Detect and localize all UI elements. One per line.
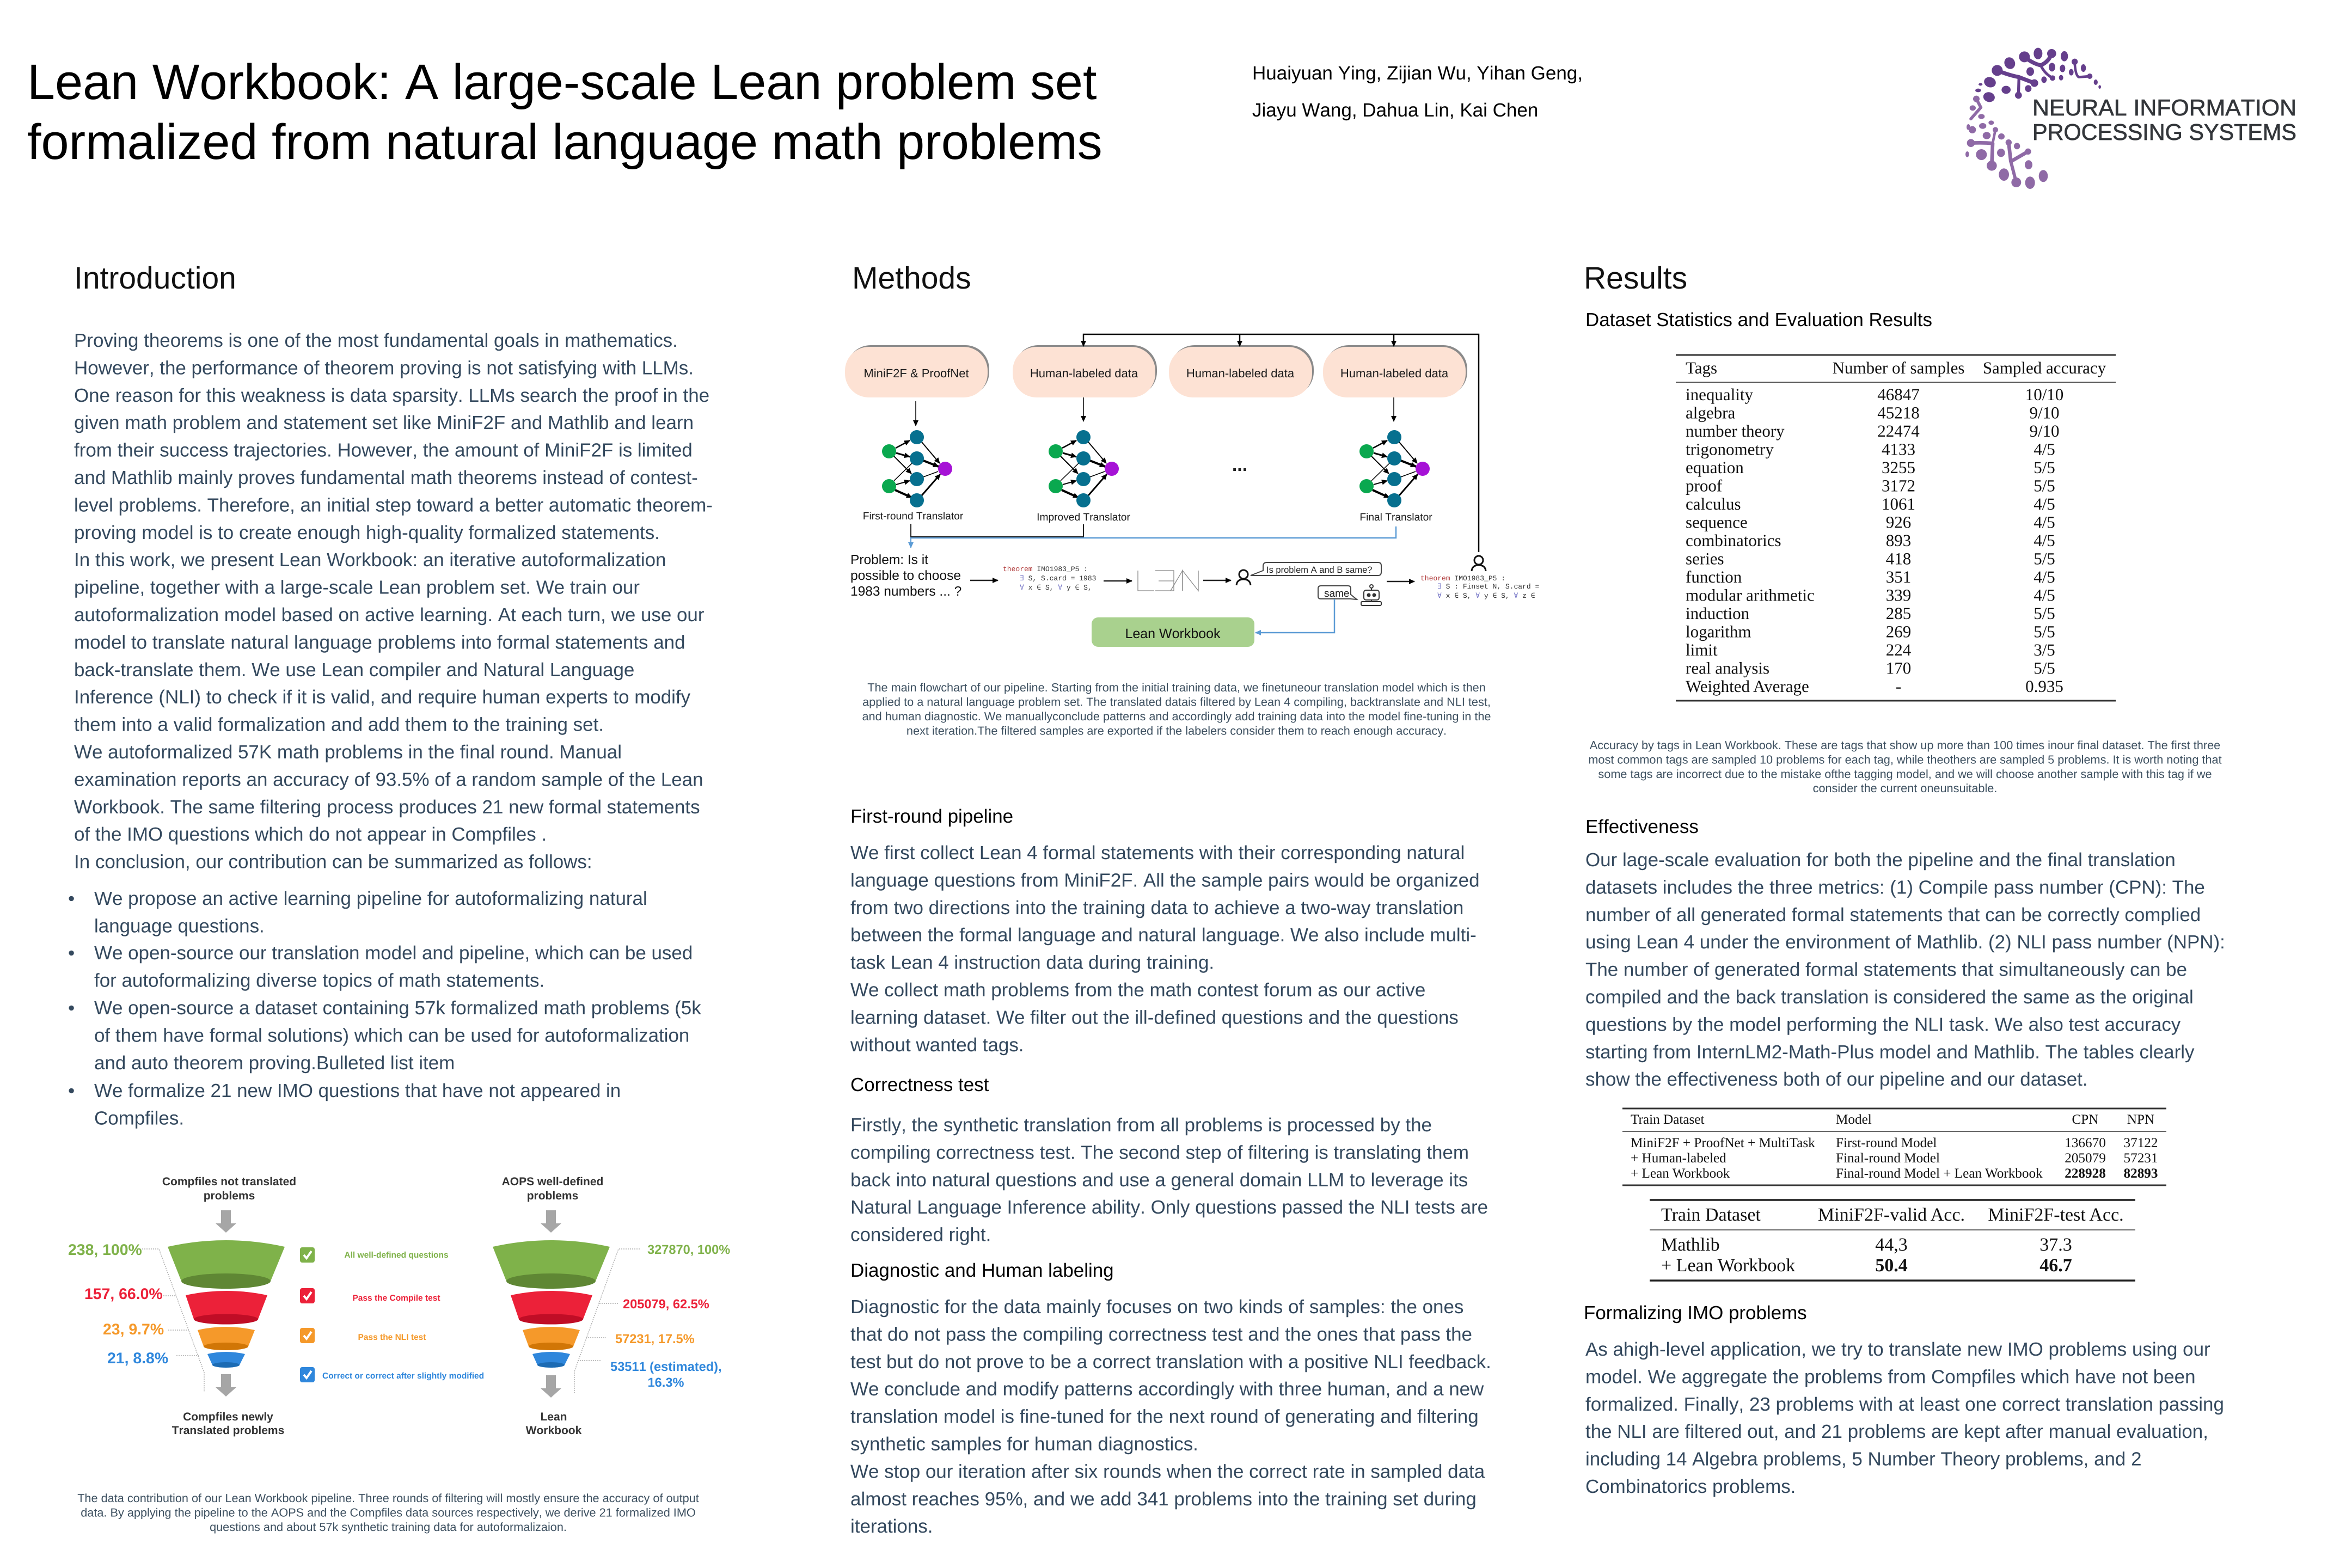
legend: Pass the NLI test [358, 1333, 426, 1342]
table: tags accuracy: 4/5 [2033, 567, 2055, 586]
text block: first-round pipeline: learning dataset. We filter out the ill-defined questions and the questions [850, 1007, 1459, 1028]
table: tags accuracy: induction [1686, 604, 1750, 623]
subheading: effectiveness: Effectiveness [1585, 816, 1699, 837]
lean code snippet: theorem [1003, 565, 1033, 573]
translator labels: Final Translator [1359, 512, 1432, 523]
subheading: first-round pipeline: First-round pipeline [850, 806, 1013, 827]
caption: tags table: consider the current oneunsuitable. [1813, 781, 1997, 795]
text block: formalizing IMO problems: the NLI are filtered out, and 21 problems are kept after manual evaluation, [1585, 1421, 2208, 1442]
table: tags accuracy: function [1686, 567, 1742, 586]
table: tags accuracy: 285 [1886, 604, 1911, 623]
table: MiniF2F accuracy: Train Dataset [1661, 1205, 1761, 1225]
table: tags accuracy: 4133 [1882, 440, 1915, 458]
text block: correctness test: compiling correctness test. The second step of filtering is translating them [850, 1142, 1469, 1163]
bulleted contributions list [68, 888, 701, 1129]
heading: methods: Methods [852, 261, 971, 296]
table: pipeline CPN and NPN: 228928 [2065, 1166, 2106, 1181]
bulleted contributions list: • [68, 1080, 75, 1101]
ellipsis: ... [1232, 455, 1247, 475]
table: pipeline CPN and NPN: CPN [2072, 1112, 2098, 1127]
text block: introduction body: and Mathlib mainly proves fundamental math theorems instead of contest- [74, 467, 698, 488]
panel: results [1584, 261, 2225, 1497]
text block: introduction body: them into a valid formalization and add them to the training set. [74, 714, 604, 736]
caption: flowchart: The main flowchart of our pipeline. Starting from the initial training data, we finetuneour translation model which is then [867, 681, 1486, 694]
lean code snippet output: x ∈ S, ∀ y ∈ S, ∀ z ∈ [1446, 592, 1535, 600]
table: pipeline CPN and NPN: 57231 [2124, 1151, 2158, 1166]
feedback arrows [916, 334, 1479, 552]
table: MiniF2F accuracy [1650, 1200, 2135, 1281]
lean code snippet: ∃ [1020, 574, 1024, 583]
table: tags accuracy: 22474 [1877, 421, 1920, 440]
icon: robot [1361, 585, 1381, 605]
text block: diagnostic: translation model is fine-tuned for the next round of generating and filtering [850, 1406, 1479, 1428]
data pills: Human-labeled data [1340, 366, 1449, 380]
text block: introduction body: In conclusion, our contribution can be summarized as follows: [74, 852, 592, 873]
table: pipeline CPN and NPN: 82893 [2124, 1166, 2158, 1181]
lean code snippet: ∀ [1020, 584, 1024, 592]
translator labels [863, 511, 1432, 523]
text block: introduction body: from their success trajectories. However, the amount of MiniF2F is limited [74, 440, 693, 461]
problem text: possible to choose [850, 568, 961, 583]
text block: introduction body: Inference (NLI) to check if it is valid, and require human experts to modify [74, 687, 691, 708]
speech bubble: same: same [1324, 588, 1349, 599]
table: tags accuracy: 1061 [1882, 494, 1915, 513]
funnel values left: 21, 8.8% [107, 1350, 168, 1367]
funnel titles: Workbook [526, 1424, 582, 1437]
text block: introduction body: We autoformalized 57K math problems in the final round. Manual [74, 742, 622, 763]
text block: effectiveness: questions by the model performing the NLI task. We also test accuracy [1585, 1014, 2181, 1035]
table: tags accuracy: 893 [1886, 531, 1911, 550]
table: tags accuracy: 10/10 [2025, 385, 2063, 404]
table: tags accuracy: 224 [1886, 640, 1912, 659]
data pills: MiniF2F & ProofNet [863, 366, 969, 380]
authors: Huaiyuan Ying, Zijian Wu, Yihan Geng, [1252, 63, 1583, 84]
funnel values right: 327870, 100% [647, 1243, 730, 1257]
table: tags accuracy: Number of samples [1833, 358, 1964, 377]
table: tags accuracy: real analysis [1686, 659, 1769, 677]
text block: introduction body: Proving theorems is one of the most fundamental goals in mathematics. [74, 330, 678, 351]
funnel arrows [216, 1210, 561, 1398]
table: pipeline CPN and NPN: First-round Model [1836, 1136, 1937, 1150]
bulleted contributions list: of them have formal solutions) which can be used for autoformalization [94, 1025, 689, 1046]
table: tags accuracy: 5/5 [2033, 659, 2055, 677]
text block: effectiveness: starting from InternLM2-Math-Plus model and Mathlib. The tables clearly [1585, 1042, 2195, 1063]
text block: diagnostic: test but do not prove to be a correct translation with a positive NLI feedback. [850, 1351, 1491, 1373]
subheading: diagnostic: Diagnostic and Human labeling [850, 1260, 1114, 1281]
dotted leader lines [142, 1249, 640, 1393]
table: MiniF2F accuracy: 50.4 [1875, 1255, 1908, 1276]
table: tags accuracy: 3/5 [2033, 640, 2055, 659]
data pills: Human-labeled data [1030, 366, 1138, 380]
funnel values right: 53511 (estimated), [610, 1360, 722, 1374]
lean code snippet: x ∈ S, ∀ y ∈ S, [1028, 584, 1092, 592]
table: tags accuracy [1676, 355, 2116, 701]
funnel values right: 16.3% [648, 1376, 684, 1390]
table: MiniF2F accuracy: 46.7 [2039, 1255, 2072, 1276]
text block: introduction body: level problems. Therefore, an initial step toward a better automatic theorem- [74, 494, 713, 516]
text block: introduction body: pipeline, together with a large-scale Lean problem set. We train our [74, 577, 640, 598]
bulleted contributions list: and auto theorem proving.Bulleted list item [94, 1052, 455, 1074]
lean code snippet: S, S.card = 1983 [1024, 574, 1096, 583]
text block: first-round pipeline: from two directions into the training data to achieve a two-way translation [850, 897, 1463, 918]
funnel titles: problems [527, 1190, 578, 1202]
text block: correctness test: considered right. [850, 1224, 991, 1246]
table: tags accuracy: logarithm [1686, 622, 1751, 641]
table: tags accuracy: 9/10 [2029, 421, 2060, 440]
network icon: first-round translator [882, 430, 952, 507]
text block: introduction body: proving model is to create enough high-quality formalized statements. [74, 522, 660, 543]
table: tags accuracy: 45218 [1877, 403, 1920, 422]
subheading: dataset statistics: Dataset Statistics and Evaluation Results [1585, 309, 1932, 330]
caption: tags table: Accuracy by tags in Lean Workbook. These are tags that show up more than 100 times inour final dataset. The first three [1590, 738, 2220, 752]
legend: All well-defined questions [344, 1251, 449, 1260]
text block: diagnostic: We conclude and modify patterns accordingly with three human, and a new [850, 1379, 1484, 1400]
funnel values left: 157, 66.0% [84, 1285, 163, 1303]
text block: diagnostic: We stop our iteration after six rounds when the correct rate in sampled data [850, 1461, 1485, 1482]
table: pipeline CPN and NPN: Model [1836, 1112, 1872, 1127]
funnel values right: 57231, 17.5% [615, 1332, 695, 1346]
text block: first-round pipeline: We collect math problems from the math contest forum as our active [850, 979, 1425, 1001]
table: tags accuracy: sequence [1686, 513, 1748, 531]
table: tags accuracy: 926 [1886, 513, 1911, 531]
table: tags accuracy: modular arithmetic [1686, 586, 1815, 604]
table: tags accuracy: 418 [1886, 549, 1911, 568]
table: tags accuracy: 4/5 [2033, 531, 2055, 550]
text block: first-round pipeline: We first collect Lean 4 formal statements with their corresponding natural [850, 842, 1465, 863]
data pills: Human-labeled data [1186, 366, 1295, 380]
table: MiniF2F accuracy: 37.3 [2039, 1235, 2072, 1255]
speech bubble: question: Is problem A and B same? [1266, 565, 1372, 575]
bulleted contributions list: We formalize 21 new IMO questions that have not appeared in [94, 1080, 621, 1101]
text block: first-round pipeline: without wanted tags. [850, 1034, 1024, 1056]
table: MiniF2F accuracy: Mathlib [1661, 1235, 1720, 1255]
table: tags accuracy: - [1896, 677, 1901, 696]
table: tags accuracy: 0.935 [2025, 677, 2063, 696]
lean code snippet output: ∀ [1437, 592, 1442, 600]
table: tags accuracy: 46847 [1877, 385, 1920, 404]
text block: diagnostic: Diagnostic for the data mainly focuses on two kinds of samples: the ones [850, 1296, 1463, 1318]
table: pipeline CPN and NPN: 37122 [2124, 1136, 2158, 1150]
table: tags accuracy: limit [1686, 640, 1718, 659]
table: pipeline CPN and NPN: MiniF2F + ProofNet + MultiTask [1631, 1136, 1815, 1150]
table: tags accuracy: 3255 [1882, 458, 1915, 477]
panel: introduction [68, 261, 730, 1534]
caption: data contribution: questions and about 57k synthetic training data for autoformalizaion. [210, 1520, 567, 1534]
table: tags accuracy: 5/5 [2033, 549, 2055, 568]
table: pipeline CPN and NPN [1622, 1108, 2166, 1185]
table: tags accuracy: 170 [1886, 659, 1911, 677]
table: pipeline CPN and NPN: Final-round Model [1836, 1151, 1940, 1166]
table: pipeline CPN and NPN: Train Dataset [1631, 1112, 1704, 1127]
text block: diagnostic: almost reaches 95%, and we add 341 problems into the training set during [850, 1489, 1477, 1510]
network icon: improved translator [1049, 430, 1119, 507]
table: tags accuracy: Sampled accuracy [1983, 358, 2106, 377]
caption: data contribution: data. By applying the pipeline to the AOPS and the Compfiles data sources respectively, we derive 21 formalized IMO [81, 1506, 696, 1519]
left funnel [168, 1240, 285, 1368]
table: tags accuracy: inequality [1686, 385, 1753, 404]
process arrows [970, 580, 1414, 581]
translator labels: First-round Translator [863, 511, 964, 522]
text block: correctness test: Firstly, the synthetic translation from all problems is processed by the [850, 1114, 1432, 1136]
funnel values left [68, 1241, 168, 1367]
table: tags accuracy: number theory [1686, 421, 1785, 440]
flowchart: pipeline [845, 334, 1539, 647]
table: tags accuracy: 3172 [1882, 476, 1915, 495]
text block: effectiveness: Our lage-scale evaluation for both the pipeline and the final translation [1585, 849, 2176, 871]
subheading: formalizing IMO problems: Formalizing IMO problems [1584, 1302, 1807, 1324]
bulleted contributions list: We open-source a dataset containing 57k formalized math problems (5k [94, 997, 701, 1019]
funnel chart: data contribution [68, 1175, 730, 1437]
text block: diagnostic: iterations. [850, 1516, 933, 1537]
funnel values right: 205079, 62.5% [623, 1297, 709, 1312]
translator labels: Improved Translator [1037, 512, 1130, 523]
text block: effectiveness: The number of generated formal statements that simultaneously can be [1585, 959, 2187, 981]
table: MiniF2F accuracy: 44,3 [1875, 1235, 1908, 1255]
right funnel [493, 1240, 610, 1368]
table: pipeline CPN and NPN: Final-round Model + Lean Workbook [1836, 1166, 2043, 1181]
table: tags accuracy: Tags [1686, 358, 1717, 377]
text block: introduction body: examination reports an accuracy of 93.5% of a random sample of the Lean [74, 769, 703, 790]
network icon: final translator [1359, 430, 1430, 507]
logo: Neural Information Processing Systems [1965, 48, 2296, 189]
funnel titles: Lean [540, 1411, 567, 1423]
table: MiniF2F accuracy: + Lean Workbook [1661, 1255, 1795, 1276]
text block: formalizing IMO problems: formalized. Finally, 23 problems with at least one correct translation passing [1585, 1394, 2224, 1415]
lean code snippet: IMO1983_P5 : [1033, 565, 1088, 573]
table: pipeline CPN and NPN: 136670 [2065, 1136, 2106, 1150]
table: pipeline CPN and NPN: + Human-labeled [1631, 1151, 1726, 1166]
title: formalized from natural language math problems [27, 114, 1102, 170]
table: tags accuracy: 9/10 [2029, 403, 2060, 422]
bulleted contributions list: • [68, 997, 75, 1019]
funnel titles: AOPS well-defined [502, 1175, 603, 1188]
table: tags accuracy: trigonometry [1686, 440, 1774, 458]
speech bubble: question [1251, 562, 1381, 575]
funnel values left: 23, 9.7% [103, 1321, 164, 1338]
table: tags accuracy: 4/5 [2033, 494, 2055, 513]
text block: effectiveness: compiled and the back translation is considered the same as the original [1585, 987, 2194, 1008]
heading: results: Results [1584, 261, 1687, 296]
lean code snippet output: S : Finset N, S.card = [1442, 583, 1539, 591]
text block: introduction body: given math problem and statement set like MiniF2F and Mathlib and learn [74, 412, 694, 433]
text block: diagnostic: that do not pass the compiling correctness test and the ones that pass the [850, 1324, 1472, 1345]
caption: tags table: some tags are incorrect due to the mistake ofthe tagging model, and we will choose another sample with this tag if we [1598, 767, 2212, 781]
text block: effectiveness: datasets includes the three metrics: (1) Compile pass number (CPN): The [1585, 877, 2205, 898]
text block: formalizing IMO problems: Combinatorics problems. [1585, 1476, 1796, 1497]
panel: methods [845, 261, 1539, 1537]
funnel titles: Translated problems [172, 1424, 284, 1437]
bulleted contributions list: We open-source our translation model and pipeline, which can be used [94, 942, 693, 964]
funnel values left: 238, 100% [68, 1241, 142, 1259]
caption: data contribution: The data contribution of our Lean Workbook pipeline. Three rounds of filtering will mostly ensure the accuracy of output [77, 1491, 699, 1505]
table: tags accuracy: equation [1686, 458, 1744, 477]
text block: introduction body: One reason for this weakness is data sparsity. LLMs search the proof in the [74, 385, 709, 406]
data pills [845, 345, 1467, 397]
caption: flowchart: and human diagnostic. We manuallyconclude patterns and accordingly add training data into the model fine-tuning in the [862, 709, 1491, 723]
table: MiniF2F accuracy: MiniF2F-valid Acc. [1818, 1205, 1965, 1225]
icon: human reviewer [1472, 556, 1486, 571]
table: tags accuracy: 5/5 [2033, 476, 2055, 495]
table: tags accuracy: 5/5 [2033, 604, 2055, 623]
icon: lean logo [1138, 571, 1198, 591]
text block: formalizing IMO problems: model. We aggregate the problems from Compfiles which have not been [1585, 1366, 2196, 1387]
table: tags accuracy: 269 [1886, 622, 1911, 641]
text block: effectiveness: show the effectiveness both of our pipeline and our dataset. [1585, 1069, 2088, 1090]
text block: introduction body: model to translate natural language problems into formal statements and [74, 632, 685, 653]
text block: introduction body: In this work, we present Lean Workbook: an iterative autoformalization [74, 549, 666, 571]
table: tags accuracy: 4/5 [2033, 513, 2055, 531]
text block: introduction body: autoformalization model based on active learning. At each turn, we use our [74, 604, 705, 626]
authors: Jiayu Wang, Dahua Lin, Kai Chen [1252, 100, 1538, 121]
text block: correctness test: Natural Language Inference ability. Only questions passed the NLI tests are [850, 1197, 1488, 1218]
text block: effectiveness: number of all generated formal statements that can be correctly complied [1585, 904, 2201, 926]
bulleted contributions list: Compfiles. [94, 1107, 184, 1129]
heading: introduction: Introduction [74, 261, 236, 296]
lean workbook box: Lean Workbook [1125, 626, 1221, 641]
table: pipeline CPN and NPN: 205079 [2065, 1151, 2106, 1166]
text block: first-round pipeline: between the formal language and natural language. We also include multi- [850, 924, 1477, 946]
table: tags accuracy: calculus [1686, 494, 1741, 513]
bulleted contributions list: We propose an active learning pipeline for autoformalizing natural [94, 888, 647, 909]
text block: correctness test: back into natural questions and use a general domain LLM to leverage its [850, 1169, 1468, 1191]
text block: first-round pipeline: task Lean 4 instruction data during training. [850, 952, 1214, 973]
title: Lean Workbook: A large-scale Lean problem set [27, 54, 1097, 110]
table: tags accuracy: 5/5 [2033, 622, 2055, 641]
bulleted contributions list: language questions. [94, 915, 265, 936]
text block: introduction body: Workbook. The same filtering process produces 21 new formal statements [74, 797, 700, 818]
lean code snippet output: IMO1983_P5 : [1450, 574, 1505, 583]
table: tags accuracy: 4/5 [2033, 586, 2055, 604]
table: tags accuracy: Weighted Average [1686, 677, 1809, 696]
lean code snippet output: theorem [1420, 574, 1450, 583]
caption: flowchart: next iteration.The filtered samples are exported if the labelers consider them to reach enough accuracy. [906, 724, 1447, 737]
lean workbook box [1092, 617, 1254, 647]
table: tags accuracy: algebra [1686, 403, 1735, 422]
arrow to lean workbook [1255, 599, 1334, 633]
table: tags accuracy: series [1686, 549, 1724, 568]
legend: Pass the Compile test [352, 1294, 440, 1303]
funnel titles [162, 1175, 603, 1437]
bulleted contributions list: for autoformalizing diverse topics of math statements. [94, 970, 544, 991]
logo: Neural Information Processing Systems: NEURAL INFORMATION [2032, 95, 2296, 120]
text block: formalizing IMO problems: As ahigh-level application, we try to translate new IMO problems using our [1585, 1339, 2210, 1360]
table: tags accuracy: combinatorics [1686, 531, 1781, 550]
funnel values right [610, 1243, 730, 1390]
subheading: correctness test: Correctness test [850, 1074, 989, 1095]
text block: diagnostic: synthetic samples for human diagnostics. [850, 1434, 1198, 1455]
translator connectors [911, 524, 1396, 548]
funnel titles: problems [204, 1190, 255, 1202]
table: MiniF2F accuracy: MiniF2F-test Acc. [1988, 1205, 2124, 1225]
funnel titles: Compfiles newly [183, 1411, 273, 1423]
text block: introduction body: of the IMO questions which do not appear in Compfiles . [74, 824, 547, 845]
problem text: Problem: Is it [850, 553, 928, 567]
legend [300, 1247, 484, 1382]
bulleted contributions list: • [68, 888, 75, 909]
caption: tags table: most common tags are sampled 10 problems for each tag, while theothers are sampled 5 problems. It is worth noting that [1588, 752, 2222, 766]
icon: human [1236, 570, 1251, 585]
text block: formalizing IMO problems: including 14 Algebra problems, 5 Number Theory problems, and 2 [1585, 1449, 2142, 1470]
table: pipeline CPN and NPN: + Lean Workbook [1631, 1166, 1730, 1181]
table: tags accuracy: proof [1686, 476, 1723, 495]
text block: effectiveness: using Lean 4 under the environment of Mathlib. (2) NLI pass number (NPN): [1585, 932, 2225, 953]
table: tags accuracy: 5/5 [2033, 458, 2055, 477]
table: tags accuracy: 4/5 [2033, 440, 2055, 458]
bulleted contributions list: • [68, 942, 75, 964]
funnel titles: Compfiles not translated [162, 1175, 296, 1188]
speech bubble: same [1318, 586, 1357, 599]
table: tags accuracy: 351 [1886, 567, 1911, 586]
text block: introduction body: back-translate them. We use Lean compiler and Natural Language [74, 659, 634, 681]
text block: introduction body: However, the performance of theorem proving is not satisfying with LLMs. [74, 357, 694, 378]
problem text: 1983 numbers ... ? [850, 584, 961, 599]
table: pipeline CPN and NPN: NPN [2127, 1112, 2154, 1127]
logo: Neural Information Processing Systems: PROCESSING SYSTEMS [2032, 119, 2296, 145]
caption: flowchart: applied to a natural language problem set. The translated datais filtered by Lean 4 compiling, backtranslate and NLI test, [862, 695, 1491, 709]
text block: first-round pipeline: language questions from MiniF2F. All the sample pairs would be organized [850, 869, 1480, 891]
lean code snippet output: ∃ [1437, 583, 1442, 591]
legend: Correct or correct after slightly modified [322, 1371, 484, 1381]
table: tags accuracy: 339 [1886, 586, 1911, 604]
